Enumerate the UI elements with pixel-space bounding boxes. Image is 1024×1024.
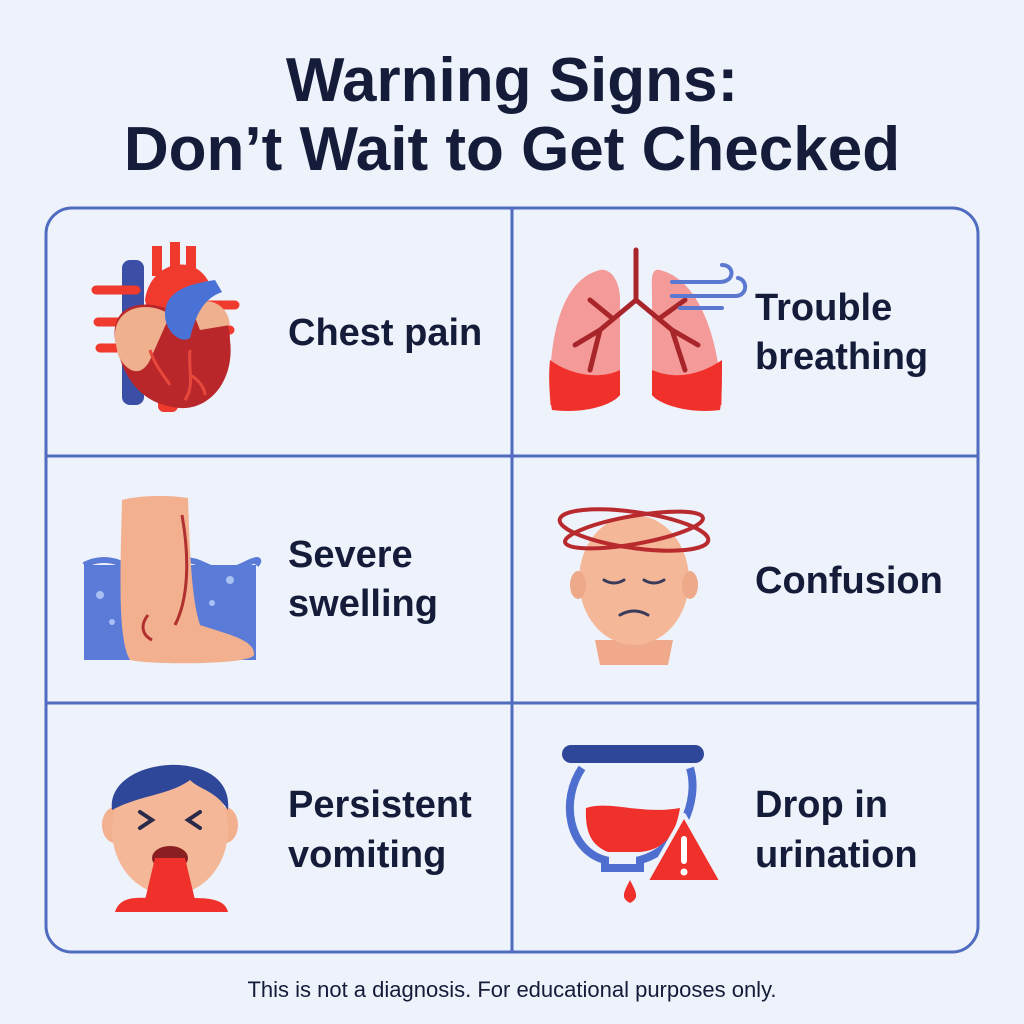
icon: bladder with warning <box>562 745 722 903</box>
icon: lungs <box>549 250 745 411</box>
grid panel frame <box>46 208 978 952</box>
cell: confusion <box>557 502 943 665</box>
label: severe swelling: swelling <box>288 583 438 625</box>
label: persistent vomiting: Persistent <box>288 784 472 826</box>
label: drop in urination <box>755 784 918 876</box>
cell: persistent vomiting <box>102 765 472 912</box>
label: chest pain: Chest pain <box>288 312 482 354</box>
label: trouble breathing: breathing <box>755 336 928 378</box>
footer disclaimer: This is not a diagnosis. For educational purposes only. <box>247 977 777 1002</box>
icon: heart <box>96 242 235 412</box>
title: Don’t Wait to Get Checked <box>124 115 900 184</box>
cell: severe swelling <box>84 496 438 663</box>
icon: vomiting face <box>102 765 238 912</box>
label: trouble breathing <box>755 287 928 378</box>
label: drop in urination: Drop in <box>755 784 888 826</box>
label: drop in urination: urination <box>755 834 918 876</box>
title: Warning Signs: <box>286 46 738 115</box>
label: severe swelling: Severe <box>288 534 413 576</box>
label: persistent vomiting: vomiting <box>288 834 446 876</box>
cell: trouble breathing <box>549 250 928 411</box>
icon: dizzy head <box>557 502 711 665</box>
cell: chest pain <box>96 242 482 412</box>
title <box>124 46 900 184</box>
label: trouble breathing: Trouble <box>755 287 892 329</box>
icon: swollen foot in water <box>84 496 258 663</box>
label: persistent vomiting <box>288 784 472 876</box>
cell: drop in urination <box>562 745 918 903</box>
label: severe swelling <box>288 534 438 625</box>
label: confusion: Confusion <box>755 560 943 602</box>
